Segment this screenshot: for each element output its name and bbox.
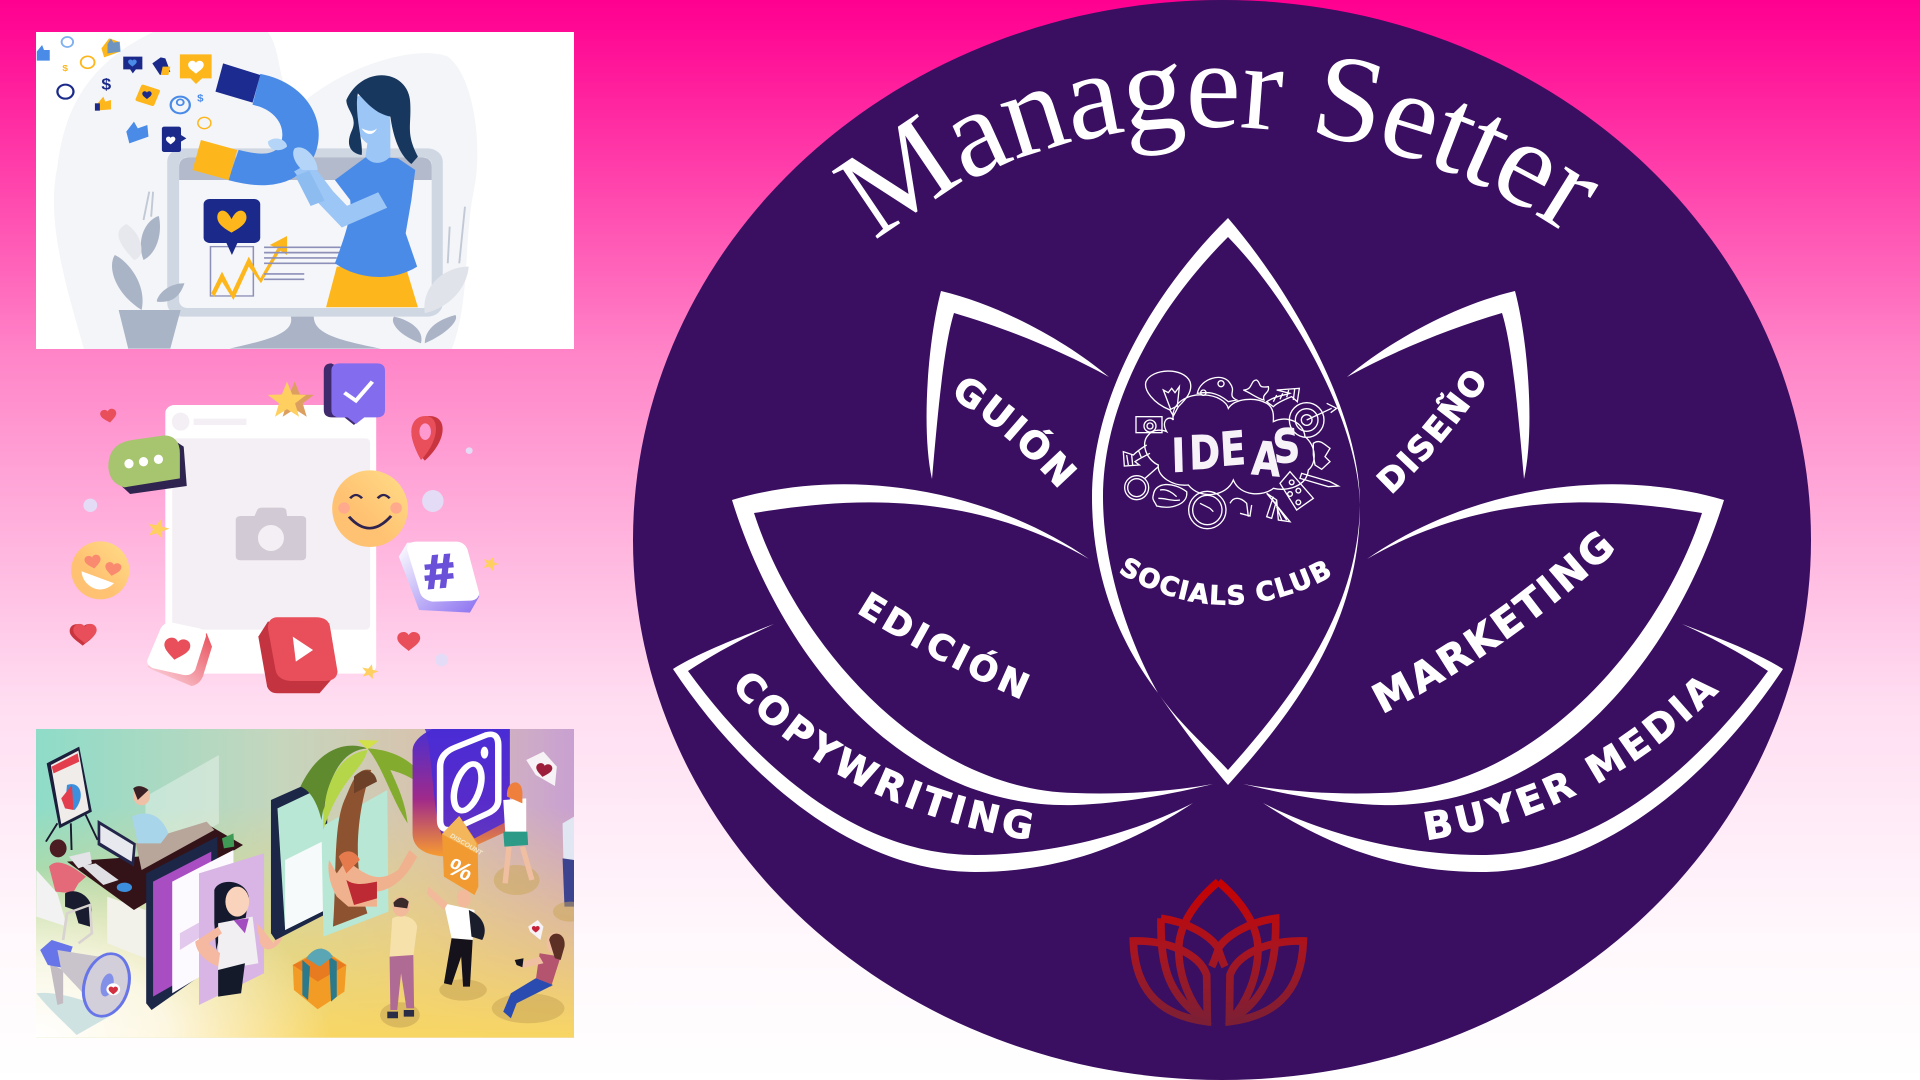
dollar signs	[62, 64, 203, 104]
floating heart cards	[526, 752, 557, 940]
chat bubble	[108, 435, 187, 494]
doodle: plug and cords	[1230, 497, 1277, 518]
doodle: domino	[1280, 472, 1313, 510]
discount tag: %	[443, 854, 477, 886]
smiling emoji	[332, 470, 408, 547]
doodle: palette	[1197, 377, 1237, 402]
doodle: camera	[1136, 417, 1162, 433]
doodle: light bulb	[1146, 371, 1191, 416]
magnet	[192, 63, 301, 180]
woman	[268, 75, 418, 307]
label: Diseño: DISEÑO	[1376, 371, 1484, 494]
seated woman with phone	[492, 933, 565, 1023]
small red lotus logo	[1133, 882, 1303, 1023]
ideas doodle	[1123, 371, 1338, 529]
dollar signs: $	[197, 93, 203, 104]
illustration: magnet attracting social engagement	[36, 32, 574, 350]
doodle: left arrow	[1123, 445, 1150, 466]
cloud outline	[1145, 395, 1314, 495]
location pin	[411, 416, 443, 461]
phone with profile and lavender card	[146, 837, 291, 1010]
doodle: brain	[1153, 485, 1187, 507]
check badge	[324, 363, 385, 425]
lotus: petal Diseño outline	[1347, 291, 1529, 479]
camera icon	[236, 508, 306, 560]
dollar signs: $	[101, 76, 111, 93]
discount tag	[442, 816, 484, 895]
doodle: pencil	[1300, 473, 1338, 487]
dollar signs: $	[62, 64, 69, 73]
IDEAS lettering: IDEAS	[1171, 418, 1302, 488]
label: Guión: GUIÓN	[956, 378, 1078, 488]
hashtag tile: #	[421, 544, 457, 599]
social icons cloud	[37, 37, 212, 152]
label: Copywriting: COPYWRITING	[736, 674, 1032, 839]
lotus: petal Guión outline	[927, 291, 1109, 479]
lotus: petal Edición outline	[732, 484, 1213, 805]
easel with chart	[46, 747, 98, 850]
discount tag: DISCOUNT	[448, 833, 484, 857]
petal labels	[736, 371, 1720, 840]
hashtag tile	[399, 542, 479, 613]
gift box	[293, 948, 346, 1009]
star	[268, 381, 314, 417]
doodle: magnifier	[1125, 467, 1158, 500]
standing people	[380, 782, 587, 1028]
instagram logo block	[413, 729, 510, 857]
doodle: hatch shape	[1267, 493, 1290, 522]
like tile	[147, 623, 212, 686]
desk workers	[36, 786, 168, 943]
purple main ellipse	[633, 0, 1811, 1080]
title: Manager Setter	[832, 59, 1598, 239]
monitor	[167, 148, 443, 349]
lotus: petal Buyer Media outline	[1263, 624, 1783, 872]
speech bubble with heart and chart	[204, 199, 341, 300]
illustration: isometric instagram marketing scene	[36, 729, 587, 1038]
label: Socials Club: SOCIALS CLUB	[1120, 558, 1330, 606]
play tile	[258, 617, 338, 693]
doodle: arrow hatch	[1267, 388, 1299, 407]
megaphone	[36, 940, 136, 1035]
label: Marketing: MARKETING	[1371, 530, 1614, 714]
lotus: centre petal outline	[1092, 218, 1360, 785]
heart-eyes emoji	[71, 541, 129, 599]
plants	[112, 192, 469, 349]
lotus: petal Marketing outline	[1243, 484, 1724, 805]
doodle: target and arrow	[1289, 403, 1337, 437]
post card	[165, 405, 376, 674]
holographic panel	[146, 755, 219, 834]
doodle: clock	[1189, 491, 1226, 529]
lotus: petal Copywriting outline	[673, 624, 1193, 872]
second phone with mint card and palm	[271, 740, 428, 940]
doodle: puzzle piece	[1313, 442, 1330, 469]
desk	[67, 820, 243, 958]
label: Buyer Media: BUYER MEDIA	[1424, 678, 1720, 840]
doodle: splash	[1243, 380, 1269, 400]
floating hearts and stars	[70, 408, 501, 680]
label: Edición: EDICIÓN	[858, 591, 1030, 699]
illustration: social media post with emojis	[70, 363, 501, 693]
